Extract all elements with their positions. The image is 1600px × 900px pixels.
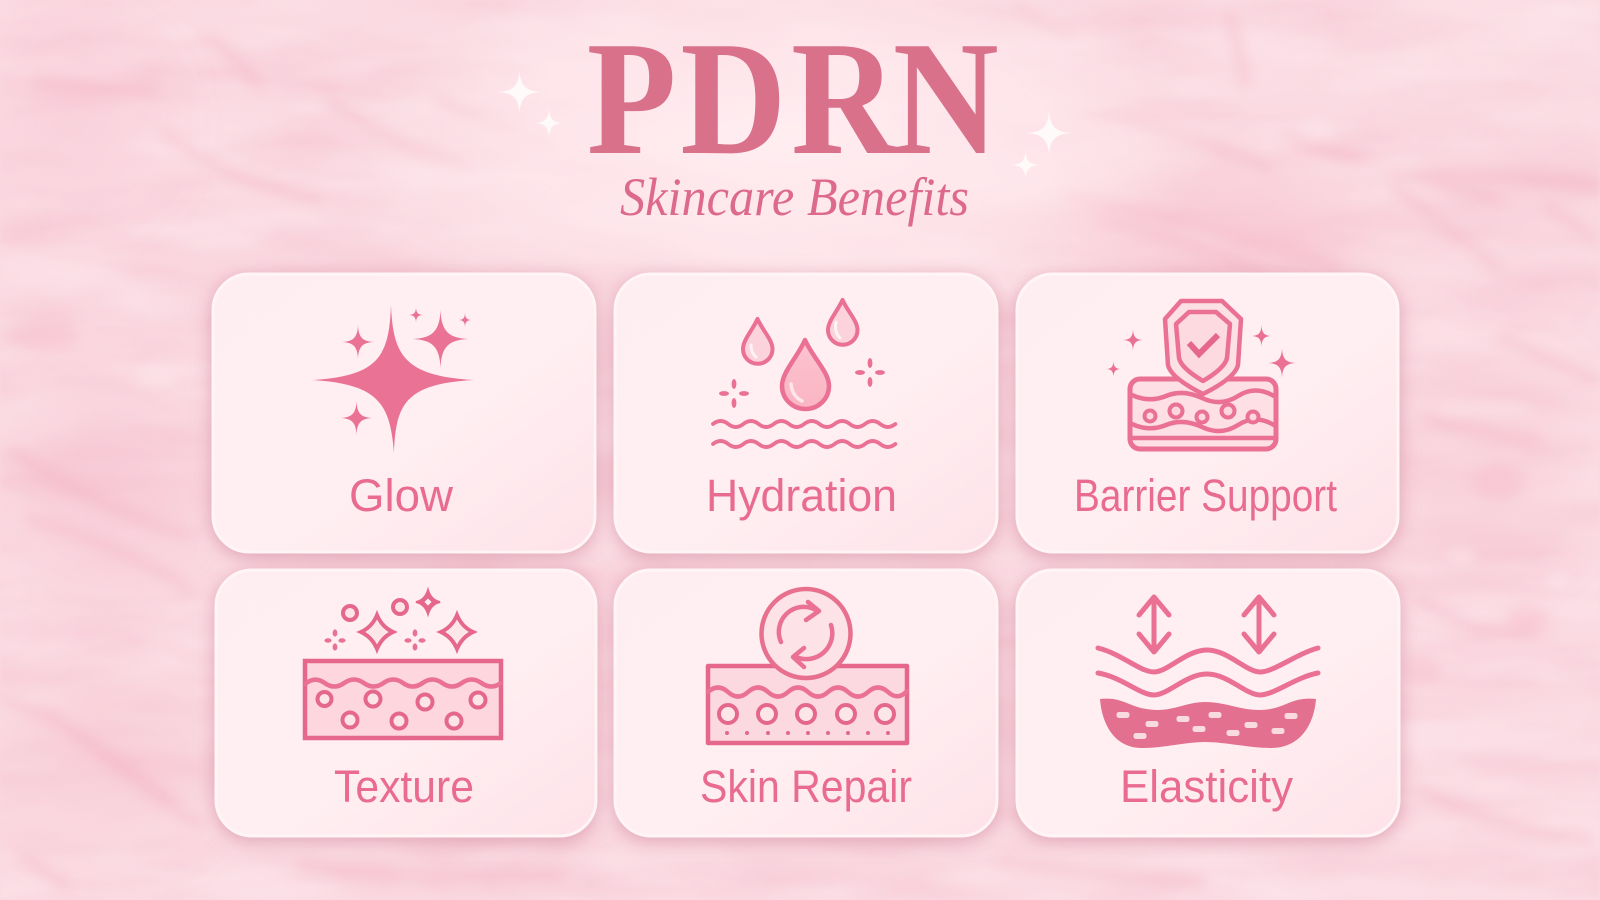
icon: elastic skin with arrows (1098, 597, 1318, 748)
panel: Hydration (615, 274, 997, 552)
card background (1017, 274, 1398, 552)
title: PDRN: PDRN (587, 8, 999, 189)
label: Barrier Support: Barrier Support (1074, 470, 1337, 521)
label: Hydration: Hydration (706, 470, 897, 521)
icon: shield on skin layers (1106, 301, 1296, 449)
card background (1017, 570, 1399, 836)
card background (615, 570, 997, 836)
panel: Elasticity (1017, 570, 1399, 836)
label: Elasticity: Elasticity (1120, 761, 1293, 812)
decorative title sparkles (498, 70, 1072, 179)
label: Skin Repair: Skin Repair (700, 761, 912, 812)
icon: skin repair cycle (708, 589, 907, 743)
subtitle: Skincare Benefits: Skincare Benefits (620, 167, 969, 227)
panel: Glow (213, 274, 595, 552)
panel: Skin Repair (615, 570, 997, 836)
panel: Texture (216, 570, 596, 836)
card background (213, 274, 595, 552)
icon: smooth skin texture (305, 590, 501, 738)
icon: sparkles (312, 305, 474, 453)
label: Glow: Glow (349, 470, 454, 521)
icon: water drops and waves (713, 300, 895, 447)
panel: Barrier Support (1017, 274, 1398, 552)
card background (216, 570, 596, 836)
label: Texture: Texture (334, 761, 474, 812)
card background (615, 274, 997, 552)
